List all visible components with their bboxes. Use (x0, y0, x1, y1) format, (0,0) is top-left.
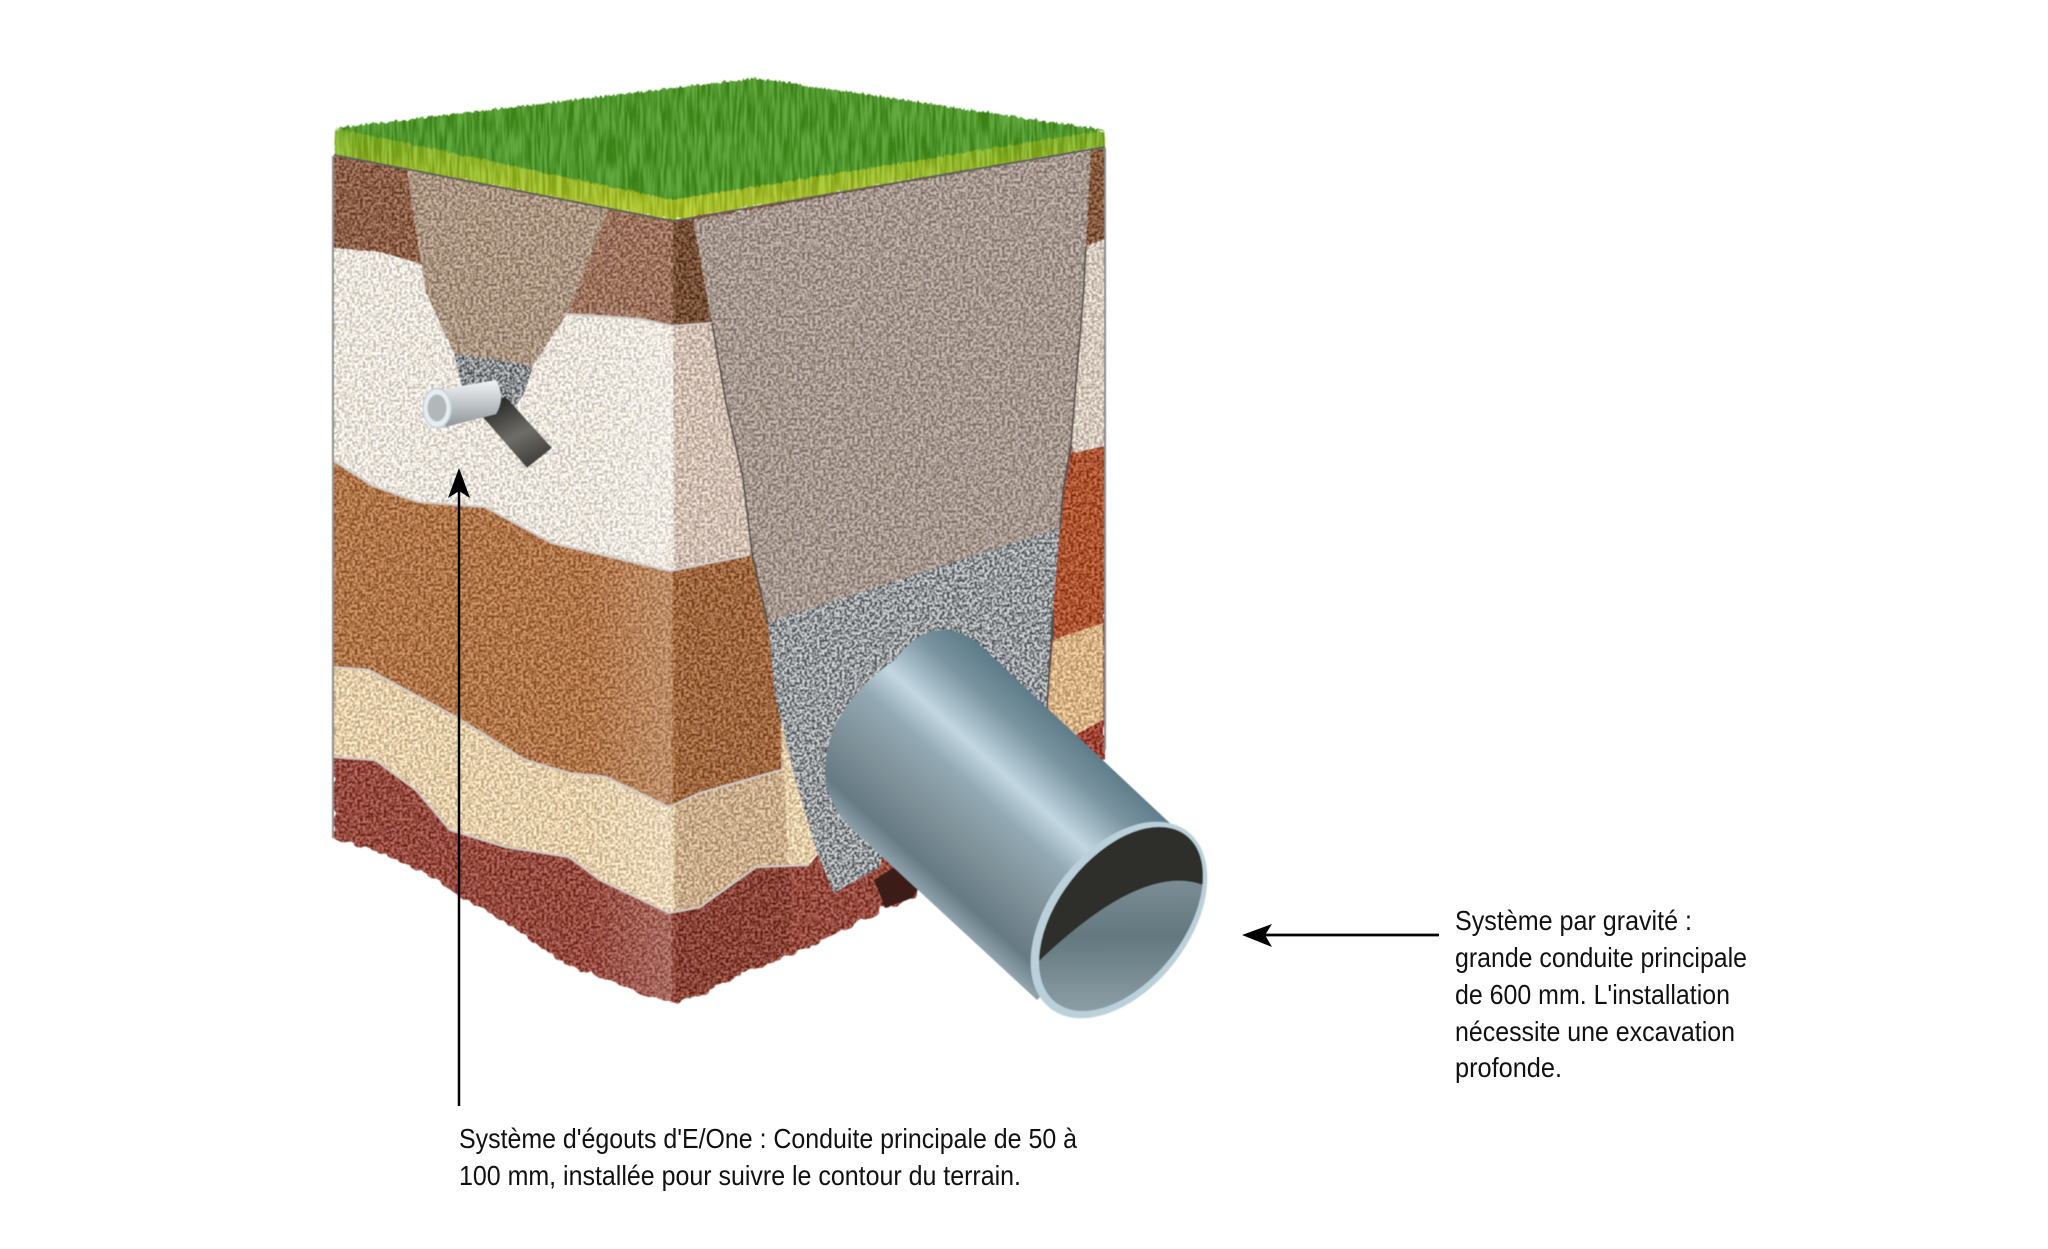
grass front fringe (334, 90, 1105, 220)
text block: E/One sewer system (459, 1123, 1077, 1191)
trench: large pipe backfill (693, 150, 1091, 624)
grass shadow line (334, 147, 1105, 221)
grass top surface (335, 78, 1105, 200)
right strip: peach (1047, 623, 1103, 735)
illustration: soil block cross-section (333, 78, 1243, 1051)
text block: gravity system: grande conduite principale (1455, 942, 1747, 973)
gravel around large pipe (768, 528, 1060, 893)
corner highlight on left face (590, 300, 672, 1003)
text block: gravity system: de 600 mm. L'installation (1455, 979, 1730, 1010)
pipe inside (1006, 797, 1236, 1041)
shade: right of the corner (673, 221, 790, 1005)
pipe body (825, 630, 1175, 1000)
grass top (334, 78, 1105, 220)
brown wedge right of small trench (564, 209, 673, 326)
right strip: cream (1071, 239, 1105, 453)
pipe dark interior (1038, 826, 1204, 961)
trench: small pipe backfill (407, 170, 609, 366)
shadow under large pipe (874, 860, 925, 908)
layer: cream sand (334, 240, 770, 571)
layer: brown clay (334, 440, 781, 807)
text block: gravity system: nécessite une excavation (1455, 1016, 1735, 1047)
text block: gravity system (1455, 905, 1747, 1083)
layer: peach sand (334, 640, 1000, 913)
crack lines (712, 246, 1086, 710)
right strip: red (1075, 720, 1103, 760)
dark brown stripe at the corner (673, 220, 712, 326)
arrow: up to small pipe (448, 468, 470, 1106)
arrow: left to large pipe (1242, 924, 1439, 947)
slab beneath small pipe (480, 396, 552, 468)
layer: red bottom soil (334, 146, 1105, 1005)
text block: E/One sewer system: 100 mm, installée pour suivre le contour du terrain. (459, 1160, 1021, 1191)
soil layers (334, 146, 1105, 1005)
right strip: orange clay (1053, 446, 1105, 640)
right strip: brown top (1086, 146, 1105, 246)
pipe rim (995, 789, 1243, 1051)
text block: gravity system: profonde. (1455, 1052, 1562, 1083)
block outer edges (333, 148, 1105, 838)
layer: top brown soil (334, 154, 712, 326)
text block: E/One sewer system: Système d'égouts d'E/One : Conduite principale de 50 à (459, 1123, 1077, 1154)
layer boundary lines (334, 314, 809, 913)
icon: large pipe (825, 630, 1243, 1051)
text block: gravity system: Système par gravité : (1455, 905, 1692, 936)
gravel around small pipe (454, 353, 533, 410)
icon: small pipe (423, 380, 501, 428)
